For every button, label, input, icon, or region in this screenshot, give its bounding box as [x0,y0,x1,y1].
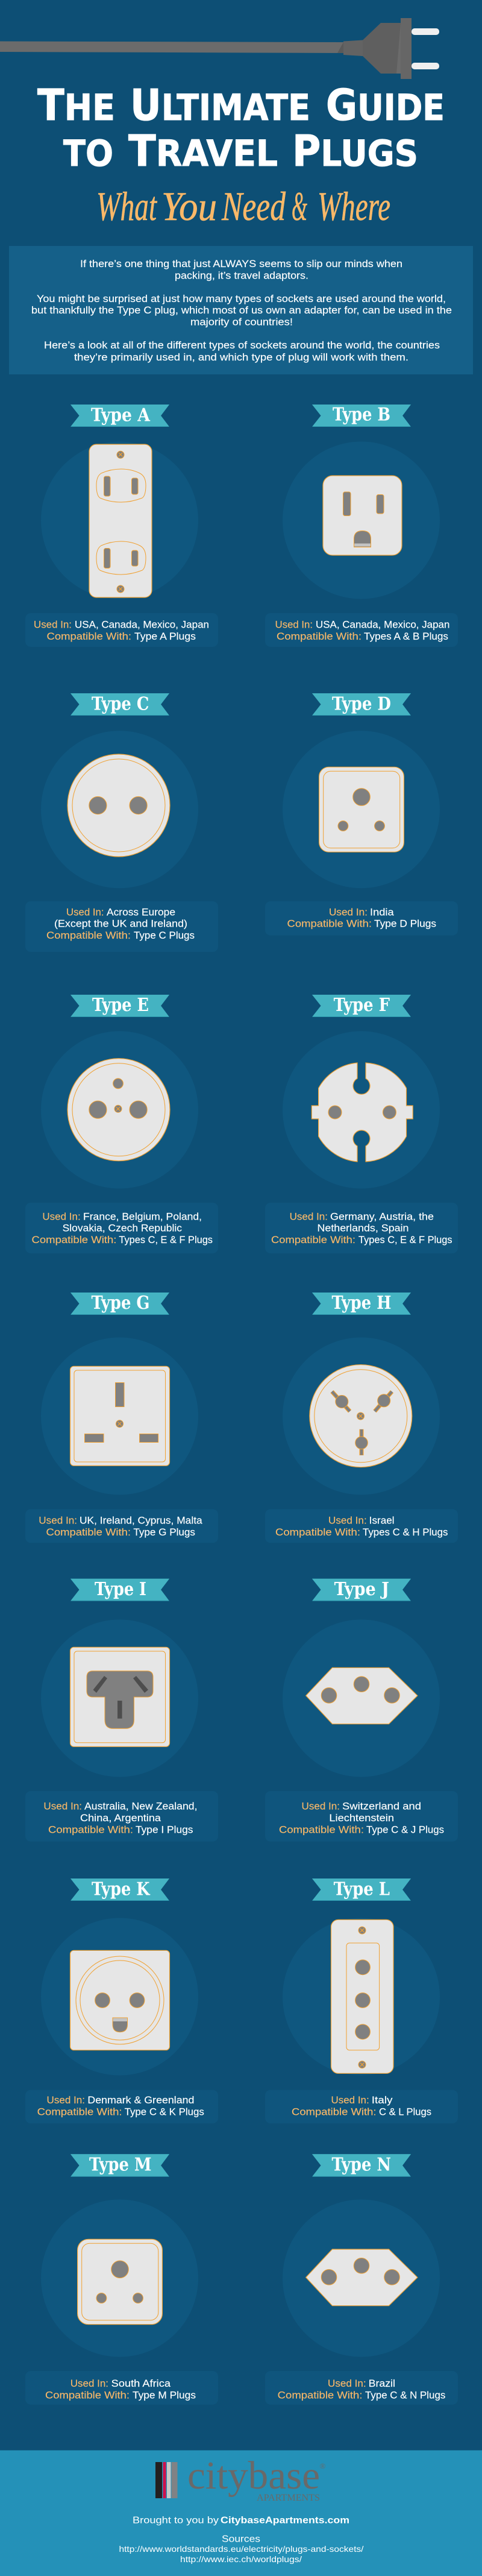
info: Type D: Used In: [329,907,368,918]
panel: introduction: Here’s a look at all of the different types of sockets around the world, the countries [44,339,440,351]
backdrop circle [41,1918,198,2075]
info: Type B: Types A & B Plugs [364,631,448,642]
panel: introduction: If there’s one thing that just ALWAYS seems to slip our minds when [80,258,402,269]
info: Type L [265,2090,458,2123]
card: Type H [265,1293,458,1543]
info: Type E: Slovakia, Czech Republic [63,1223,182,1234]
info: Type J: Compatible With: [279,1824,364,1835]
panel: footer [0,2449,482,2576]
info: Type J: Used In: [301,1801,340,1812]
subtitle: Need [221,183,286,229]
info: Type D: Compatible With: [287,919,372,930]
info: Type N: Type C & N Plugs [365,2390,445,2401]
ribbon: Type I [70,1579,169,1601]
icon: Type G socket [70,1366,170,1466]
info: Type E: France, Belgium, Poland, [83,1211,202,1222]
logo: Citybase Apartments: ® [319,2461,325,2471]
sources: Sources [222,2534,260,2545]
ribbon: Type G [70,1293,169,1315]
card: Type K [25,1878,218,2123]
backdrop circle [283,441,440,599]
info: Type C: Used In: [66,907,104,918]
icon: Type C socket [67,754,170,857]
info: Type A: Type A Plugs [134,631,196,642]
card: Type M [25,2154,218,2405]
ribbon: Type N: Type N [331,2155,391,2175]
info: Type F [265,1203,458,1253]
ribbon: Type N [312,2154,411,2177]
card: Type L [265,1878,458,2123]
info: Type K [25,2090,218,2123]
ribbon: Type L [312,1878,411,1901]
backdrop circle [41,1619,198,1777]
info: Type A: USA, Canada, Mexico, Japan [75,620,209,631]
info: Type H: Compatible With: [275,1527,360,1538]
ribbon: Type M [70,2154,169,2177]
icon: Type I socket [70,1647,170,1746]
info: Type G: Used In: [39,1516,77,1526]
panel: introduction: majority of countries! [190,316,293,328]
info: Type F: Netherlands, Spain [317,1223,408,1234]
info: Type C: Compatible With: [46,930,131,941]
logo: Citybase Apartments: APARTMENTS [257,2493,320,2503]
title: THE [37,80,115,130]
info: Type B [265,613,458,647]
info: Type E [25,1203,218,1253]
info: Type H [265,1509,458,1543]
backdrop circle [41,1031,198,1189]
icon: Type F socket [311,1063,413,1162]
ribbon: Type B [312,404,411,427]
ribbon: Type M: Type M [89,2155,152,2175]
info: Type M: Type M Plugs [133,2390,196,2401]
ribbon: Type K [70,1878,169,1901]
card: Type A [25,405,218,647]
info: Type N: Brazil [369,2378,395,2389]
ribbon: Type A [70,405,169,427]
logo: Citybase Apartments [155,2454,325,2503]
icon: Type D socket [319,767,404,852]
backdrop circle [283,1031,440,1189]
info: Type A: Used In: [34,620,72,631]
info: Type D: India [370,907,395,918]
info: Type F: Germany, Austria, the [330,1211,434,1222]
backdrop circle [283,1337,440,1495]
card: Type C [25,693,218,952]
credit line [133,2516,349,2526]
backdrop circle [283,2199,440,2357]
info: Type F: Used In: [290,1211,328,1222]
backdrop circle [283,731,440,888]
title: ULTIMATE [130,80,310,130]
info: Type H: Types C & H Plugs [363,1527,448,1538]
icon: Type A socket [89,444,152,597]
info: Type C: Type C Plugs [134,930,195,941]
ribbon: Type E: Type E [92,995,149,1016]
backdrop circle [283,1918,440,2075]
info: Type M: Used In: [70,2378,108,2389]
info: Type K: Type C & K Plugs [125,2106,204,2117]
ribbon: Type H: Type H [331,1293,392,1314]
info: Type K: Compatible With: [37,2106,122,2117]
panel: introduction: packing, it’s travel adaptors. [175,269,308,281]
ribbon: Type J: Type J [334,1579,389,1600]
info: Type B: USA, Canada, Mexico, Japan [316,620,449,631]
backdrop circle [41,441,198,599]
info: Type G [25,1509,218,1543]
ribbon: Type D: Type D [332,693,391,715]
subtitle: What [96,183,157,229]
info: Type J: Type C & J Plugs [366,1824,444,1835]
info: Type D: Type D Plugs [374,919,436,930]
icon: Type J socket [306,1667,418,1724]
card: Type N [265,2154,458,2405]
info: Type K: Used In: [47,2095,85,2106]
info: Type G: Compatible With: [46,1527,131,1538]
info: Type L: C & L Plugs [379,2106,431,2117]
sources: http://www.worldstandards.eu/electricity/plugs-and-sockets/ [119,2544,364,2554]
icon: Type B socket [323,476,402,555]
info: Type J [265,1791,458,1842]
ribbon: Type I: Type I [95,1579,146,1600]
panel: introduction: You might be surprised at just how many types of sockets are used around the world, [37,293,446,304]
card: Type E [25,995,218,1253]
panel: introduction: they’re primarily used in, and which type of plug will work with them. [74,351,408,363]
ribbon: Type C [70,693,169,716]
illustration: plug and cord [0,18,439,79]
title: GUIDE [326,80,445,130]
subtitle: You [161,183,217,229]
ribbon: Type B: Type B [333,404,390,426]
info: Type D [265,901,458,936]
icon: Type N socket [306,2249,418,2306]
info: Type I: Type I Plugs [136,1824,193,1835]
info: Type J: Switzerland and [342,1801,421,1812]
info: Type E: Compatible With: [31,1235,116,1245]
icon: Type L socket [331,1919,393,2073]
title: TO [63,133,113,175]
ribbon: Type E [70,995,169,1017]
info: Type F: Compatible With: [271,1235,355,1245]
logo: Citybase Apartments: citybase [187,2454,320,2498]
backdrop circle [41,1337,198,1495]
ribbon: Type F: Type F [334,995,390,1016]
info: Type C [25,901,218,952]
info: Type C: (Except the UK and Ireland) [54,919,187,930]
card: Type G [25,1293,218,1543]
icon: Type K socket [70,1950,170,2050]
card: Type F [265,995,458,1253]
info: Type I [25,1791,218,1842]
info: Type B: Used In: [275,620,313,631]
info: Type A [25,613,218,647]
info: Type N: Used In: [328,2378,366,2389]
credit line: CitybaseApartments.com [221,2516,349,2526]
card: Type I [25,1579,218,1842]
ribbon: Type G: Type G [92,1293,149,1314]
info: Type M [25,2371,218,2405]
sources [119,2534,364,2564]
info: Type G: UK, Ireland, Cyprus, Malta [80,1516,203,1526]
info: Type C: Across Europe [107,907,175,918]
info: Type A: Compatible With: [47,631,131,642]
info: Type J: Liechtenstein [329,1813,394,1824]
subtitle: & [292,183,307,229]
card: Type D [265,693,458,936]
ribbon: Type A: Type A [91,405,151,426]
info: Type B: Compatible With: [277,631,362,642]
info: Type H: Israel [369,1516,395,1526]
info: Type N [265,2371,458,2405]
backdrop circle [41,731,198,888]
info: Type M: South Africa [111,2378,171,2389]
ribbon: Type J [312,1579,411,1601]
icon: Type E socket [67,1059,170,1161]
info: Type L: Compatible With: [292,2106,376,2117]
credit line: Brought to you by [133,2516,219,2526]
panel: introduction [9,246,473,374]
info: Type I: Used In: [43,1801,82,1812]
title: PLUGS [292,126,418,176]
ribbon: Type H [312,1293,411,1315]
info: Type G: Type G Plugs [133,1527,195,1538]
info: Type E: Used In: [42,1211,81,1222]
backdrop circle [283,1619,440,1777]
card: Type J [265,1579,458,1842]
ribbon: Type F [312,995,411,1017]
info: Type I: Australia, New Zealand, [84,1801,198,1812]
ribbon: Type K: Type K [92,1878,150,1900]
sources: http://www.iec.ch/worldplugs/ [180,2554,302,2564]
backdrop circle [41,2199,198,2357]
info: Type L: Italy [372,2095,393,2106]
info: Type F: Types C, E & F Plugs [358,1235,452,1245]
subtitle: Where [318,183,390,229]
info: Type L: Used In: [331,2095,369,2106]
card: Type B [265,404,458,647]
ribbon: Type D [312,693,411,716]
info: Type H: Used In: [328,1516,367,1526]
info: Type E: Types C, E & F Plugs [119,1235,213,1245]
ribbon: Type C: Type C [92,693,149,715]
title [37,80,445,176]
icon: Type H socket [310,1365,412,1467]
info: Type K: Denmark & Greenland [87,2095,194,2106]
subtitle [96,183,390,229]
panel: introduction: but thankfully the Type C plug, which most of us own an adapter for, can be used in the [31,304,452,316]
title: TRAVEL [128,126,278,176]
info: Type N: Compatible With: [278,2390,363,2401]
info: Type I: Compatible With: [48,1824,133,1835]
info: Type M: Compatible With: [45,2390,130,2401]
icon: Type M socket [78,2239,162,2325]
info: Type I: China, Argentina [80,1813,161,1824]
ribbon: Type L: Type L [334,1878,390,1900]
